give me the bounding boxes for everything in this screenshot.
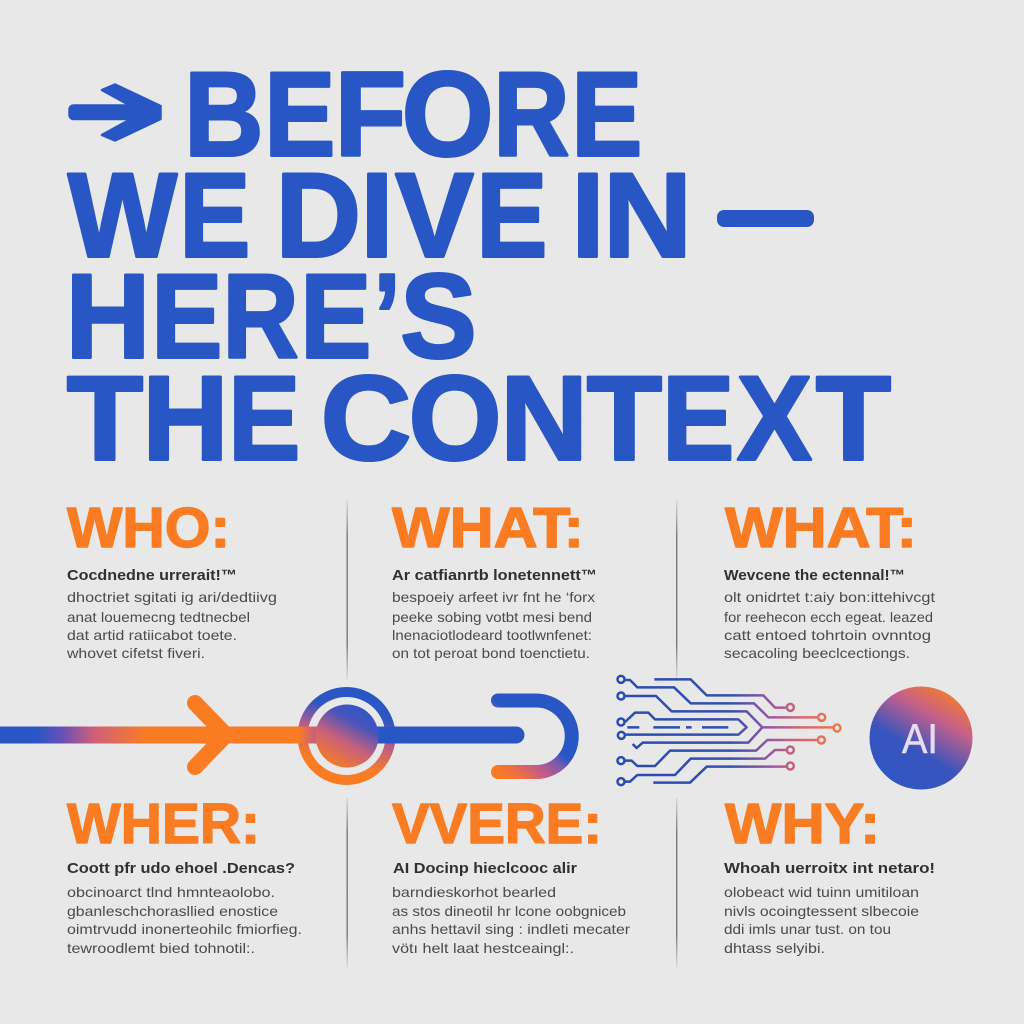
icon: target disc: [316, 704, 378, 768]
heading: why: WHY:: [725, 792, 880, 855]
title line: HERE'S: E: [151, 250, 222, 384]
body text: obcinoarct tlnd hmnteaolobo.: [67, 884, 275, 900]
panel: who: [66, 496, 277, 661]
body text: lnenaciotlodeard tootlwnfenet:: [392, 627, 592, 643]
title line: THE CONTEXT: T: [587, 352, 662, 486]
body text: anhs hettavil sing : indleti mecater: [392, 921, 630, 937]
body text: [724, 589, 935, 661]
title: [66, 48, 891, 486]
icon: target ring: [302, 692, 390, 780]
title line: HERE'S: E: [300, 250, 371, 384]
panel: why: [724, 792, 935, 956]
heading: what: WHAT:: [725, 496, 917, 559]
subheading: Cocdnedne urrerait!™: [67, 567, 237, 584]
body text: on tot peroat bond toenctietu.: [392, 645, 590, 661]
panel: what 1: [392, 496, 597, 661]
body text: olt onidrtet t:aiy bon:ittehivcgt: [724, 589, 935, 605]
title line: BEFORE: O: [402, 48, 494, 182]
subheading: Wevcene the ectennal!™: [724, 567, 905, 584]
title line: WE DIVE IN: I: [361, 148, 393, 282]
body text: dhtass selyibi.: [724, 940, 825, 956]
heading: vvere: VVERE:: [392, 792, 602, 855]
title line: THE CONTEXT: X: [737, 352, 812, 486]
body text: [392, 884, 630, 956]
panel: where: [67, 792, 302, 956]
icon: AI badge: AI: [902, 715, 938, 762]
body text: nivls ocoingtessent slbecoie: [724, 903, 919, 919]
subheading: AI Docinp hieclcooc alir: [393, 860, 577, 877]
title line: BEFORE: R: [493, 48, 570, 182]
timeline graphic: [0, 692, 572, 780]
body text: [392, 589, 595, 661]
title dash: [717, 210, 814, 227]
body text: ddi imls unar tust. on tou: [724, 921, 891, 937]
body text: vötı helt laat hestceaingl:.: [392, 940, 574, 956]
title line: BEFORE: B: [184, 48, 263, 182]
panel: vvere: [392, 792, 630, 956]
body text: dat artid ratiicabot toete.: [67, 627, 237, 643]
title line: THE CONTEXT: E: [662, 352, 734, 486]
body text: anat louemecng tedtnecbel: [67, 609, 250, 625]
title line: THE CONTEXT: C: [321, 352, 411, 486]
icon: circuit traces: [617, 676, 840, 785]
body text: secacoling beeclcectiongs.: [724, 645, 910, 661]
body text: barndieskorhot bearled: [392, 884, 556, 900]
body text: peeke sobing votbt mesi bend: [392, 609, 592, 625]
body text: dhoctriet sgitati ig ari/dedtiivg: [67, 589, 277, 605]
title line: THE CONTEXT: T: [816, 352, 891, 486]
title line: WE DIVE IN: E: [179, 148, 250, 282]
body text: [67, 884, 302, 956]
title line: THE CONTEXT: E: [228, 352, 300, 486]
body text: tewroodlemt bied tohnotil:.: [67, 940, 255, 956]
title line: WE DIVE IN: W: [68, 148, 178, 282]
title line: THE CONTEXT: T: [67, 352, 143, 486]
body text: [66, 589, 277, 661]
title line: BEFORE: E: [264, 48, 335, 182]
body text: gbanleschchorasllied enostice: [67, 903, 278, 919]
title line: WE DIVE IN: N: [603, 148, 692, 282]
body text: as stos dineotil hr lcone oobgniceb: [392, 903, 626, 919]
title line: HERE'S: ’: [374, 250, 400, 384]
dividers: [346, 500, 677, 968]
title line: THE CONTEXT: O: [409, 352, 502, 486]
title line: BEFORE: E: [571, 48, 642, 182]
title line: WE DIVE IN: E: [476, 148, 547, 282]
body text: [724, 884, 919, 956]
body text: catt entoed tohrtoin ovnntog: [724, 627, 931, 643]
body text: olobeact wid tuinn umitiloan: [724, 884, 919, 900]
timeline bar: [0, 726, 516, 744]
title line: THE CONTEXT: N: [500, 352, 588, 486]
heading: who: WHO:: [67, 496, 230, 559]
panel: what 2: [724, 496, 935, 661]
title line: HERE'S: H: [66, 250, 150, 384]
title line: BEFORE: F: [335, 48, 406, 182]
subheading: Ar catfianrtb lonetennett™: [392, 567, 597, 584]
subheading: Whoah uerroitx int netaro!: [724, 860, 935, 877]
icon: title arrow: [70, 84, 160, 140]
icon: hook: [498, 700, 572, 772]
body text: oimtrvudd inonerteohilc fmiorfieg.: [67, 921, 302, 937]
body text: for reehecon ecch egeat. leazed: [724, 609, 933, 625]
subheading: Coott pfr udo ehoel .Dencas?: [67, 860, 295, 877]
icon: orange arrowhead: [195, 703, 226, 767]
heading: wher: WHER:: [67, 792, 260, 855]
title line: HERE'S: S: [400, 250, 477, 384]
title line: WE DIVE IN: I: [572, 148, 604, 282]
body text: bespoeiy arfeet ivr fnt he ‘forx: [392, 589, 595, 605]
heading: what: WHAT:: [392, 496, 584, 559]
title line: WE DIVE IN: V: [395, 148, 474, 282]
body text: whovet cifetst fiveri.: [66, 645, 205, 661]
title line: HERE'S: R: [222, 250, 299, 384]
title line: THE CONTEXT: H: [143, 352, 228, 486]
icon: AI badge: [870, 686, 972, 790]
title line: WE DIVE IN: D: [276, 148, 361, 282]
